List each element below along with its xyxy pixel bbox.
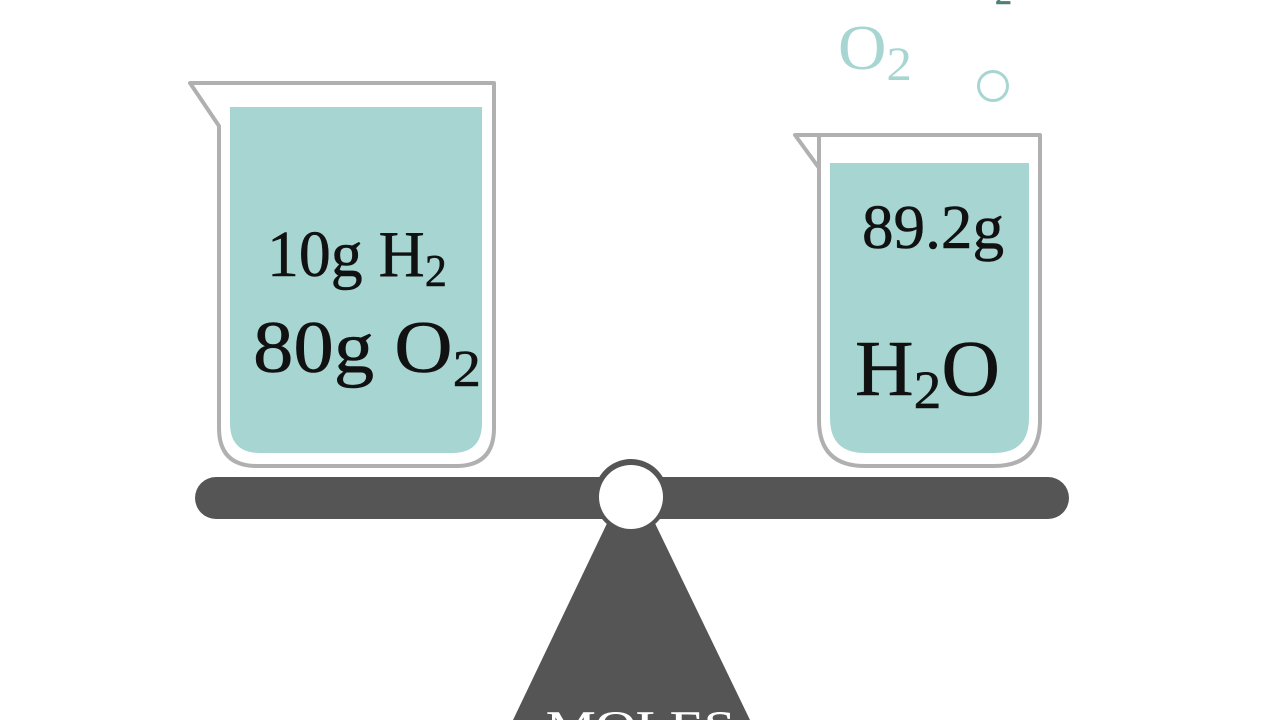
left beaker label: 10g H2: 10g H (267, 218, 430, 291)
right beaker: product (795, 135, 1040, 466)
gas bubble (978, 72, 1008, 100)
right beaker label: H2O: O (941, 326, 1000, 413)
balance beam (195, 477, 1069, 519)
gas label: O2 rising: O (838, 13, 884, 83)
right beaker label: 89.2g: 89.2g (862, 194, 1004, 262)
left beaker liquid (230, 107, 482, 453)
left beaker label: 80g O2: 80g O (253, 307, 436, 389)
right beaker outline (795, 135, 1040, 466)
left beaker outline (190, 83, 494, 466)
gas label: O2 rising: 2 (886, 38, 912, 91)
left beaker label: 10g H2: 2 (425, 245, 447, 296)
right beaker liquid (830, 163, 1029, 453)
left beaker label: 80g O2: 2 (453, 341, 481, 398)
balance pivot (594, 459, 668, 533)
left beaker: reactants (190, 83, 494, 466)
right beaker label: H2O: 2 (914, 360, 941, 420)
right beaker label: H2O: H (855, 326, 912, 413)
balance fulcrum (513, 515, 750, 720)
